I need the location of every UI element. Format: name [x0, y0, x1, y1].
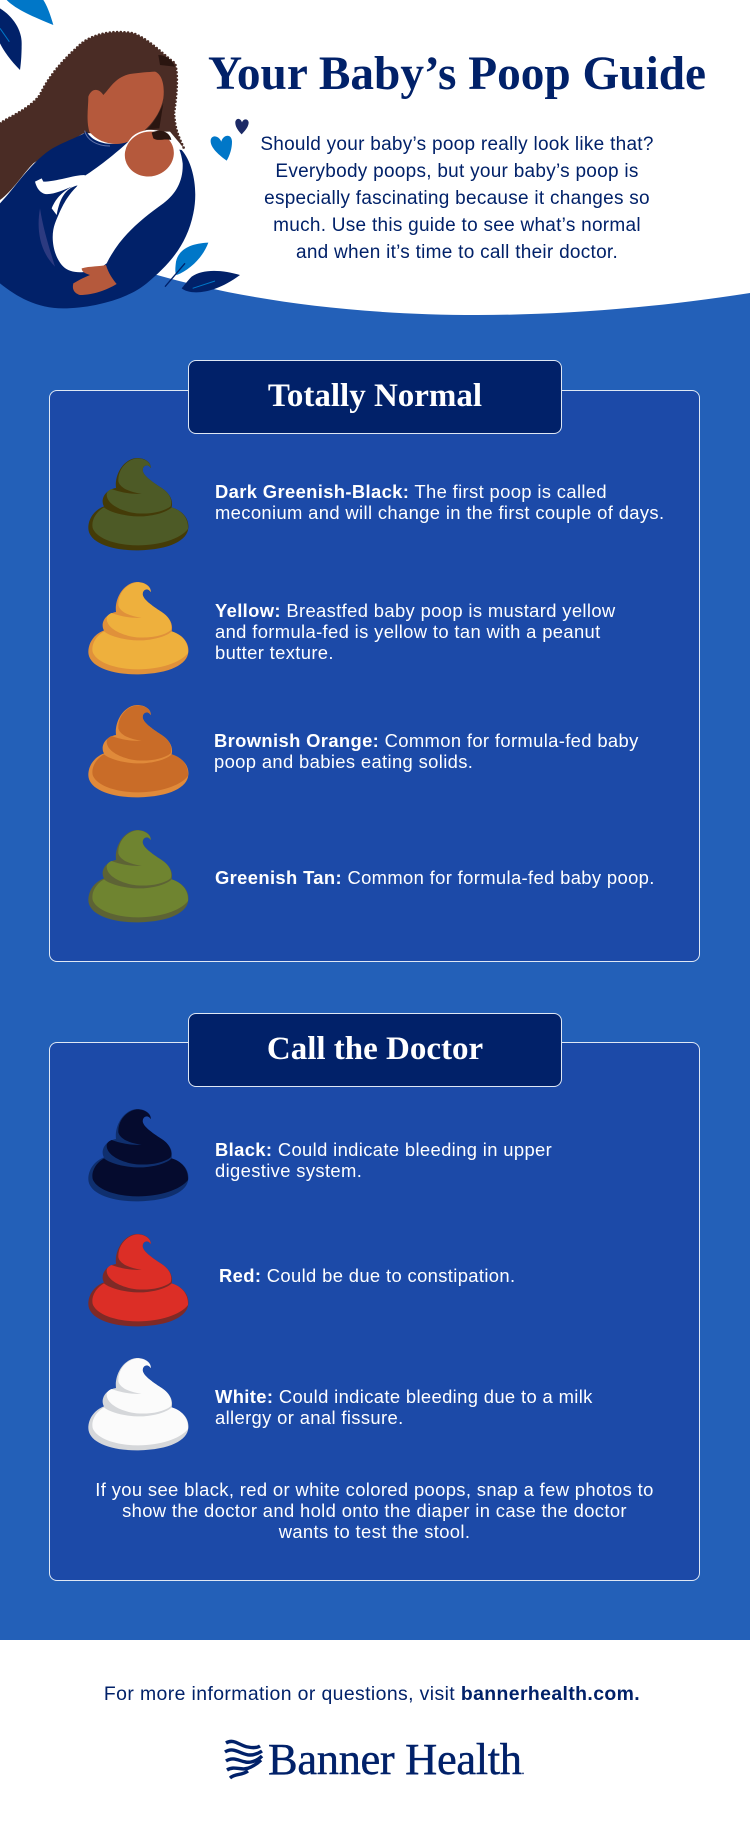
icon: top leaf light	[7, 0, 53, 25]
poop: brownish orange	[88, 705, 188, 798]
text: dark greenish-black: Dark Greenish-Black: The first poop is called	[215, 481, 607, 502]
poop: yellow	[88, 582, 188, 674]
hand	[73, 265, 117, 295]
footer text: For more information or questions, visit bannerhealth.com.	[104, 1683, 640, 1705]
text: dark greenish-black: meconium and will change in the first couple of days.	[215, 502, 664, 523]
text: white	[215, 1386, 593, 1428]
icon: waves	[224, 1740, 264, 1780]
text: white: allergy or anal fissure.	[215, 1407, 404, 1428]
icon: bottom leaf dark	[182, 271, 240, 292]
intro text: Everybody poops, but your baby’s poop is	[275, 161, 639, 182]
heading: call the doctor: Call the Doctor	[267, 1031, 483, 1067]
heading: totally normal: Totally Normal	[268, 378, 482, 414]
baby hair	[152, 131, 171, 140]
text: black: Black: Could indicate bleeding in upper	[215, 1139, 552, 1160]
text: brownish orange: poop and babies eating solids.	[214, 751, 473, 772]
hair	[0, 32, 184, 200]
intro text: Should your baby’s poop really look like that?	[260, 134, 654, 155]
text: white: White: Could indicate bleeding due to a milk	[215, 1386, 593, 1407]
face	[88, 72, 164, 144]
dark hair	[147, 55, 175, 129]
text: greenish tan: Greenish Tan: Common for formula-fed baby poop.	[215, 867, 655, 888]
panel: call the doctor	[49, 1042, 700, 1581]
collar	[85, 131, 110, 146]
intro text: much. Use this guide to see what’s normal	[273, 215, 641, 236]
baby head	[120, 126, 179, 182]
text: dark greenish-black	[215, 481, 664, 523]
text: brownish orange	[214, 730, 639, 772]
text: brownish orange: Brownish Orange: Common for formula-fed baby	[214, 730, 639, 751]
text: black	[215, 1139, 552, 1181]
note text	[95, 1479, 654, 1542]
poop: dark greenish-black	[88, 458, 188, 550]
intro text	[260, 134, 654, 263]
title: Your Baby’s Poop Guide	[208, 48, 706, 100]
heading: call the doctor	[188, 1013, 562, 1087]
icon: top leaf dark	[0, 8, 22, 70]
icon: heart dark	[235, 119, 249, 134]
note text: If you see black, red or white colored poops, snap a few photos to	[95, 1479, 654, 1500]
text: yellow	[215, 600, 616, 663]
text: black: digestive system.	[215, 1160, 362, 1181]
blanket tail	[35, 175, 85, 215]
logo: banner health	[224, 1734, 524, 1784]
sleeve shadow	[39, 208, 55, 267]
poop: black	[88, 1109, 188, 1202]
panel: totally normal	[49, 390, 700, 962]
illustration: mother holding baby	[0, 0, 249, 308]
poop: white	[88, 1358, 188, 1450]
poop: greenish tan	[88, 830, 188, 922]
note text: wants to test the stool.	[279, 1521, 470, 1542]
intro text: and when it’s time to call their doctor.	[296, 242, 618, 263]
intro text: especially fascinating because it changes so	[264, 188, 650, 209]
text: red: Red: Could be due to constipation.	[219, 1265, 515, 1286]
wordmark: Banner Health.	[268, 1734, 524, 1784]
icon: bottom leaf light	[165, 243, 208, 287]
body	[0, 132, 195, 308]
baby blanket	[53, 130, 183, 272]
text: yellow: Yellow: Breastfed baby poop is mustard yellow	[215, 600, 616, 621]
poop: red	[88, 1234, 188, 1326]
note text: show the doctor and hold onto the diaper in case the doctor	[122, 1500, 627, 1521]
text: yellow: and formula-fed is yellow to tan with a peanut	[215, 621, 601, 642]
heading: totally normal	[188, 360, 562, 434]
text: yellow: butter texture.	[215, 642, 334, 663]
icon: heart blue	[211, 136, 232, 161]
